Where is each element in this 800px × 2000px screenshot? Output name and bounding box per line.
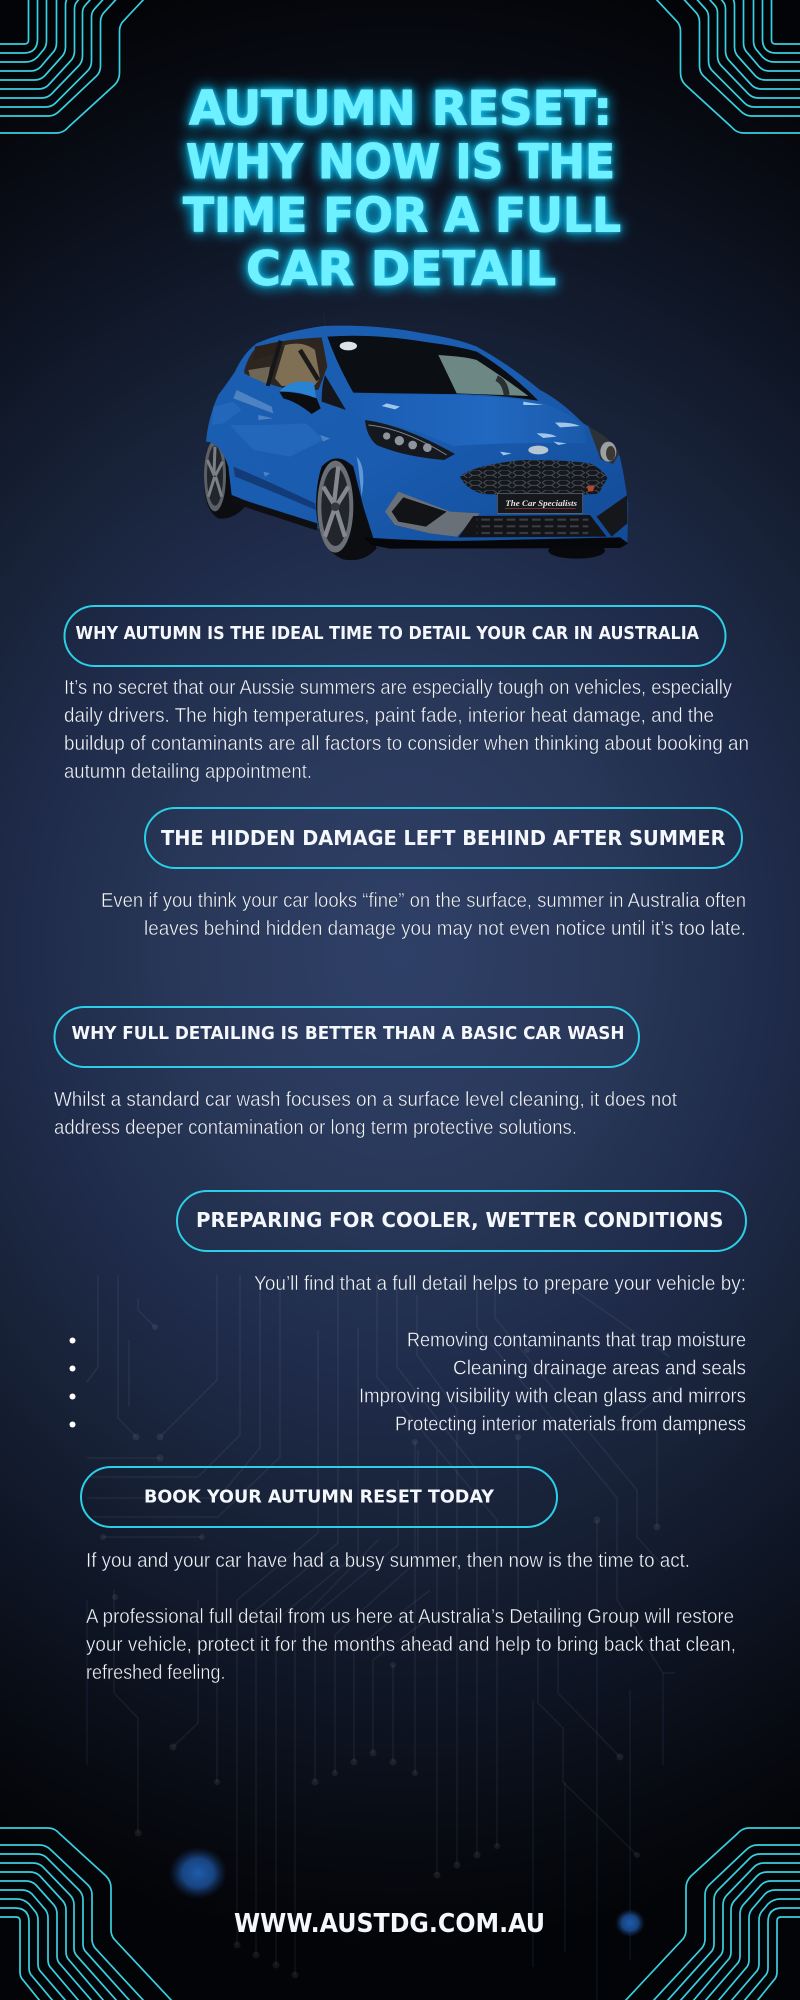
title: AUTUMN RESET:: [189, 82, 612, 136]
title: TIME FOR A FULL: [183, 188, 621, 244]
heading pill 5: [81, 1467, 557, 1527]
car: wing mirror: [279, 382, 321, 414]
paragraph 3: Whilst a standard car wash focuses on a surface level cleaning, it does not: [54, 1089, 677, 1111]
car: badge: [528, 446, 548, 454]
intro line: You’ll find that a full detail helps to prepare your vehicle by:: [254, 1273, 746, 1295]
paragraph 1: buildup of contaminants are all factors to consider when thinking about booking an: [64, 733, 749, 755]
corner circuit: top right: [620, 0, 800, 133]
paragraph 1: autumn detailing appointment.: [64, 761, 312, 783]
car: rear wheel: [204, 440, 245, 519]
heading pill 2: [145, 808, 742, 868]
heading pill 1: [64, 606, 726, 666]
heading pill 3: WHY FULL DETAILING IS BETTER THAN A BASIC CAR WASH: [72, 1023, 624, 1044]
paragraph 3: address deeper contamination or long term protective solutions.: [54, 1117, 577, 1139]
car: number plate: [497, 493, 583, 513]
bullet list: Improving visibility with clean glass and mirrors: [359, 1386, 746, 1408]
car: ground shadow: [548, 543, 605, 559]
corner circuit: bottom left: [0, 1828, 172, 2000]
heading pill 1: WHY AUTUMN IS THE IDEAL TIME TO DETAIL YOUR CAR IN AUSTRALIA: [76, 623, 699, 644]
paragraph 2: leaves behind hidden damage you may not even notice until it’s too late.: [144, 918, 746, 940]
bullet list: Removing contaminants that trap moisture: [407, 1330, 746, 1352]
glow blob left: [169, 1847, 227, 1899]
paragraph 5: your vehicle, protect it for the months ahead and help to bring back that clean,: [86, 1634, 736, 1656]
car: side reflections: [212, 402, 323, 457]
title: [183, 82, 621, 297]
car: fog lamp recess: [392, 497, 447, 527]
car: front wheel: [316, 458, 377, 560]
car: body shell: [206, 326, 628, 547]
car: front lip: [363, 537, 628, 549]
bullet list: [70, 1330, 746, 1436]
heading pill 2: THE HIDDEN DAMAGE LEFT BEHIND AFTER SUMMER: [161, 826, 726, 850]
bullet list: Cleaning drainage areas and seals: [453, 1358, 746, 1380]
paragraph 2: [101, 890, 746, 940]
car: side skirt: [231, 496, 317, 531]
car: right headlight: [588, 427, 619, 464]
car: antenna: [323, 313, 326, 327]
paragraph 1: [64, 677, 749, 783]
car: fog lamp surround: [385, 492, 480, 537]
car: quarter window: [322, 375, 346, 410]
paragraph 2: Even if you think your car looks “fine” on the surface, summer in Australia often: [101, 890, 746, 912]
glow blob right: [615, 1909, 645, 1937]
paragraph 3: [54, 1089, 677, 1139]
paragraph 1: It’s no secret that our Aussie summers are especially tough on vehicles, especially: [64, 677, 732, 699]
car: side window: [244, 337, 327, 390]
car: windscreen: [327, 336, 538, 401]
car: bonnet highlights: [382, 402, 580, 455]
paragraph 5: refreshed feeling.: [86, 1662, 226, 1684]
paragraph 5: [86, 1550, 736, 1684]
website footer: WWW.AUSTDG.COM.AU: [234, 1909, 545, 1939]
title: WHY NOW IS THE: [186, 135, 615, 190]
car illustration: [204, 313, 628, 560]
bullet list: Protecting interior materials from dampness: [395, 1414, 746, 1436]
paragraph 5: If you and your car have had a busy summer, then now is the time to act.: [86, 1550, 690, 1572]
car: lower intake: [458, 515, 607, 537]
car: number plate: The Car Specialists: [505, 499, 577, 508]
car: ST badge: [587, 486, 595, 491]
corner circuit: top left: [0, 0, 180, 133]
paragraph 1: daily drivers. The high temperatures, paint fade, interior heat damage, and the: [64, 705, 714, 727]
car: right corner intake: [597, 495, 627, 537]
heading pill 5: BOOK YOUR AUTUMN RESET TODAY: [144, 1488, 494, 1508]
heading pill 3: [54, 1007, 639, 1067]
car: grille: [460, 460, 607, 495]
car: left headlight: [365, 420, 455, 460]
paragraph 5: A professional full detail from us here at Australia’s Detailing Group will restore: [86, 1606, 734, 1628]
heading pill 4: [177, 1191, 746, 1251]
car: bonnet: [347, 395, 587, 446]
title: CAR DETAIL: [246, 242, 556, 297]
car: front wheel arch highlight: [357, 457, 363, 497]
circuit board pattern: [87, 1275, 675, 2000]
corner circuit: bottom right: [625, 1828, 800, 2000]
heading pill 4: PREPARING FOR COOLER, WETTER CONDITIONS: [196, 1208, 724, 1232]
